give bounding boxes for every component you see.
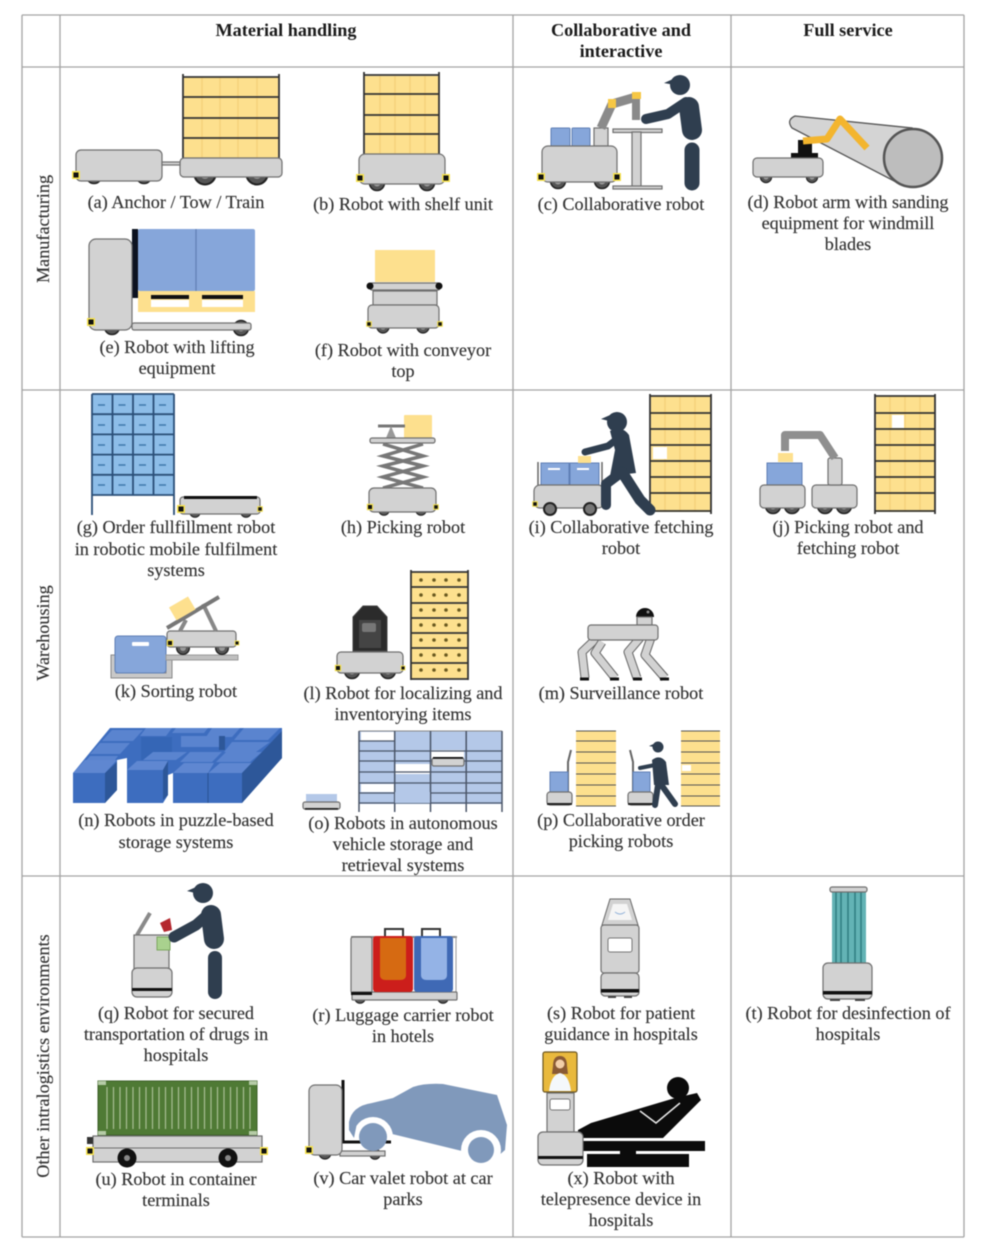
robot t: disinfection [823, 887, 872, 1000]
caption d: (d) Robot arm with sanding [747, 192, 949, 212]
column heading: collaborative and interactive: interactive [580, 41, 662, 61]
robot e: lifting equipment [87, 229, 255, 336]
column heading: material handling: Material handling [216, 20, 356, 40]
caption i: robot [602, 538, 640, 558]
robot b: shelf unit [356, 72, 450, 190]
robot h: picking robot with scissor lift [367, 415, 439, 515]
caption f: top [391, 361, 415, 381]
robot q: secured drug transport [132, 883, 215, 997]
storage n: puzzle based blocks [73, 728, 282, 803]
caption x: telepresence device in [541, 1189, 701, 1209]
caption x: hospitals [589, 1210, 653, 1230]
robot l: localizing and inventorying [335, 570, 468, 680]
caption q: (q) Robot for secured [98, 1003, 254, 1023]
robot i: collaborative fetching [532, 394, 711, 515]
caption x: (x) Robot with [567, 1168, 675, 1188]
robot g: order fulfilment rack and robot [92, 394, 263, 517]
caption g: in robotic mobile fulfilment [75, 539, 277, 559]
caption v: (v) Car valet robot at car [313, 1168, 493, 1188]
column heading: full service: Full service [803, 20, 893, 40]
robot x: telepresence [538, 1052, 705, 1167]
robot r: luggage carrier [351, 929, 457, 1003]
caption n: (n) Robots in puzzle-based [78, 810, 274, 830]
caption d: equipment for windmill [762, 213, 934, 233]
caption o: vehicle storage and [333, 834, 473, 854]
caption v: parks [383, 1189, 423, 1209]
caption t: hospitals [816, 1024, 880, 1044]
caption r: in hotels [372, 1026, 434, 1046]
caption q: transportation of drugs in [84, 1024, 268, 1044]
caption i: (i) Collaborative fetching [529, 517, 713, 537]
caption q: hospitals [144, 1045, 208, 1065]
caption e: (e) Robot with lifting [99, 337, 255, 357]
robot p: collaborative order picking [547, 731, 720, 806]
row heading: warehousing: Warehousing [33, 585, 53, 681]
column heading: collaborative and interactive: Collaborative and [551, 20, 691, 40]
caption m: (m) Surveillance robot [539, 683, 703, 704]
caption r: (r) Luggage carrier robot [312, 1005, 494, 1025]
caption d: blades [825, 234, 871, 254]
caption u: terminals [142, 1190, 210, 1210]
storage o: autonomous vehicle rack [303, 731, 502, 812]
robot s: patient guidance [601, 899, 639, 997]
caption l: inventorying items [335, 704, 471, 724]
caption k: (k) Sorting robot [115, 681, 237, 702]
caption l: (l) Robot for localizing and [304, 683, 502, 703]
robot d: arm sanding windmill blade [753, 116, 942, 187]
caption a: (a) Anchor / Tow / Train [88, 192, 264, 213]
caption n: storage systems [119, 832, 233, 852]
caption s: guidance in hospitals [544, 1024, 698, 1044]
caption g: systems [147, 560, 205, 580]
caption o: retrieval systems [342, 855, 464, 875]
caption j: (j) Picking robot and [772, 517, 924, 537]
robot a: anchor tow train [72, 74, 282, 184]
caption t: (t) Robot for desinfection of [745, 1003, 951, 1023]
robot j: picking and fetching robots [760, 394, 935, 514]
caption e: equipment [139, 358, 215, 378]
robot u: container terminal [86, 1081, 268, 1168]
robot v: car valet [305, 1080, 507, 1170]
robot m: surveillance quadruped [580, 608, 669, 679]
caption h: (h) Picking robot [341, 517, 465, 538]
caption j: fetching robot [797, 538, 899, 558]
caption g: (g) Order fullfillment robot [77, 517, 275, 537]
robot k: sorting [111, 596, 239, 678]
caption f: (f) Robot with conveyor [315, 340, 491, 360]
caption s: (s) Robot for patient [547, 1003, 695, 1023]
row heading: other intralogistics environments: Other intralogistics environments [33, 934, 53, 1178]
row heading: manufacturing: Manufacturing [33, 175, 53, 283]
caption o: (o) Robots in autonomous [308, 813, 498, 833]
caption p: (p) Collaborative order [537, 810, 705, 830]
caption p: picking robots [569, 831, 673, 851]
caption c: (c) Collaborative robot [538, 194, 704, 215]
caption b: (b) Robot with shelf unit [313, 194, 493, 215]
robot c: collaborative robot [537, 75, 692, 189]
robot f: conveyor top [366, 250, 443, 333]
caption u: (u) Robot in container [95, 1169, 257, 1189]
